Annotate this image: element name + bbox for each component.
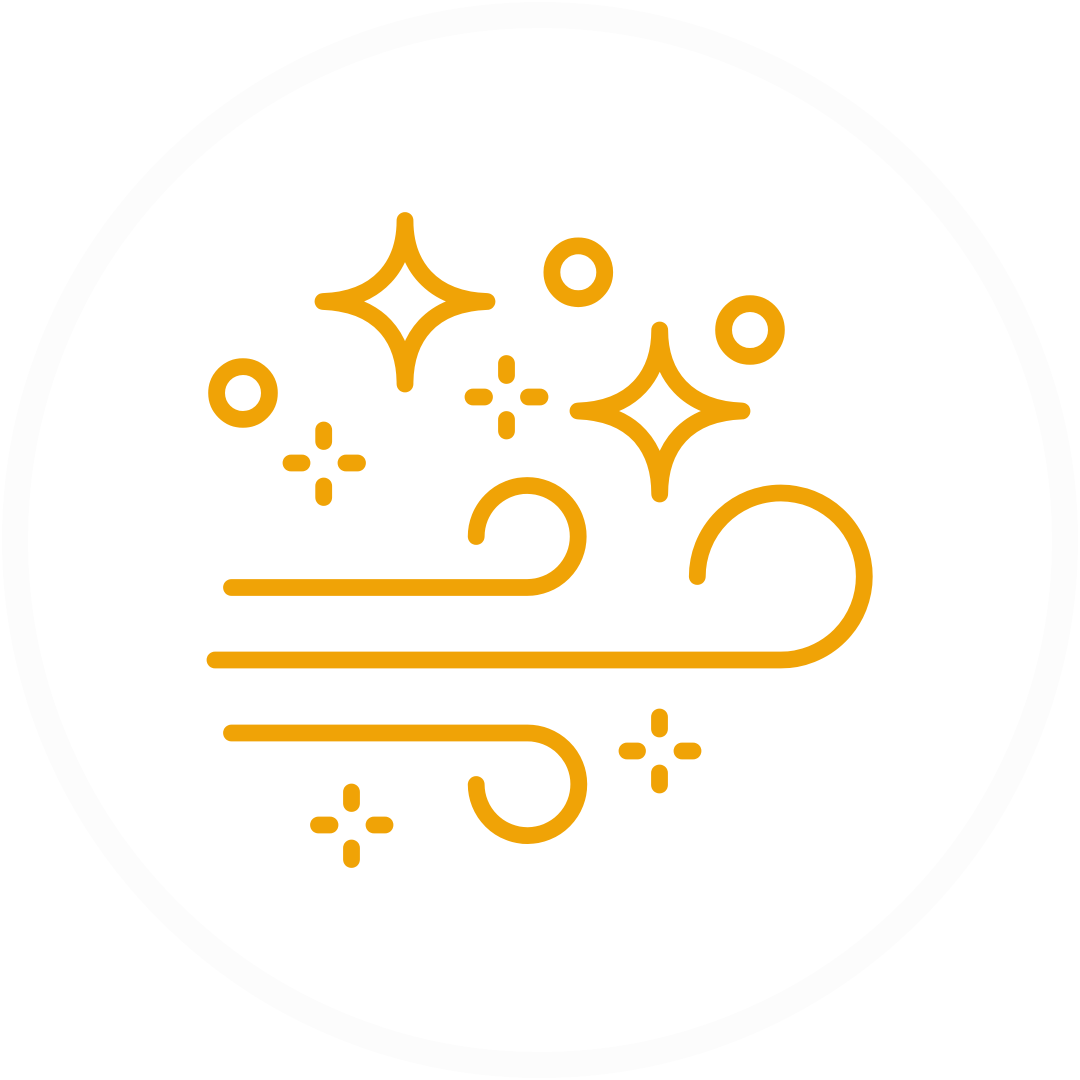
icon: large sparkle right xyxy=(578,330,742,494)
icon: plus twinkle lower right xyxy=(627,717,693,785)
icon: sparkles and wind xyxy=(215,220,864,860)
icon: wind line top xyxy=(232,486,578,588)
icon: wind line bottom xyxy=(232,733,579,836)
icon: plus twinkle left xyxy=(291,430,358,498)
icon: wind line middle xyxy=(215,493,864,660)
icon: small ring left xyxy=(217,367,269,419)
icon: small ring right xyxy=(724,304,776,356)
icon: small ring top xyxy=(552,246,605,299)
icon: large sparkle left xyxy=(323,220,487,384)
icon: plus twinkle center xyxy=(473,364,540,431)
icon: plus twinkle bottom xyxy=(318,792,385,860)
